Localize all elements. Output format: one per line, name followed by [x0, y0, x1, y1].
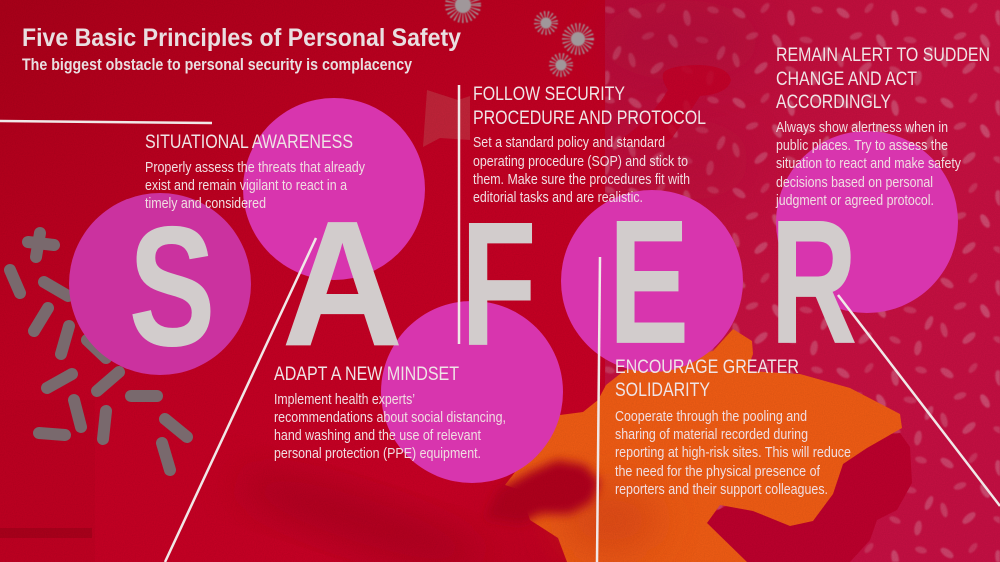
- panel: encourage greater solidarity: [615, 356, 851, 498]
- icon: coronavirus particles: [452, 0, 588, 72]
- panel: encourage greater solidarity: the need for the physical presence of: [615, 464, 821, 480]
- panel: adapt a new mindset: Implement health experts’: [274, 392, 415, 408]
- panel: follow security procedure and protocol: FOLLOW SECURITY: [473, 83, 625, 105]
- panel: remain alert to sudden change: situation to react and make safety: [776, 156, 962, 172]
- dark red paint blot top: [620, 65, 731, 150]
- panel: adapt a new mindset: recommendations about social distancing,: [274, 410, 506, 426]
- panel: follow security procedure and protocol: operating procedure (SOP) and stick to: [473, 154, 688, 170]
- panel: situational awareness: timely and considered: [145, 196, 266, 212]
- panel: remain alert to sudden change: ACCORDINGLY: [776, 91, 891, 113]
- SAFER letters: A: [282, 184, 403, 383]
- SAFER letters: E: [609, 183, 689, 380]
- panel: adapt a new mindset: [274, 363, 506, 462]
- panel: encourage greater solidarity: sharing of material recorded during: [615, 427, 808, 443]
- panel: encourage greater solidarity: reporters and their support colleagues.: [615, 482, 828, 498]
- icon: grey plus and pill marks: [10, 233, 187, 470]
- SAFER letters: S: [129, 191, 215, 381]
- panel: remain alert to sudden change: judgment or agreed protocol.: [775, 193, 934, 209]
- panel: situational awareness: Properly assess the threats that already: [145, 160, 366, 176]
- dark red blot inside splash: [485, 460, 600, 524]
- panel: follow security procedure and protocol: [473, 83, 706, 206]
- SAFER letters: R: [770, 183, 857, 380]
- panel: adapt a new mindset: ADAPT A NEW MINDSET: [274, 363, 459, 385]
- title: [22, 24, 461, 74]
- panel: situational awareness: [145, 131, 366, 212]
- panel: follow security procedure and protocol: PROCEDURE AND PROTOCOL: [473, 107, 706, 129]
- panel: remain alert to sudden change: Always show alertness when in: [776, 120, 948, 136]
- faded grey paper scrap: [423, 90, 470, 147]
- panel: situational awareness: exist and remain vigilant to react in a: [145, 178, 348, 194]
- magenta circles behind letters: [69, 98, 958, 483]
- title: Five Basic Principles of Personal Safety: [22, 24, 461, 52]
- panel: follow security procedure and protocol: Set a standard policy and standard: [473, 135, 665, 151]
- SAFER letters: F: [461, 186, 536, 383]
- panel: remain alert to sudden change: decisions based on personal: [776, 175, 933, 191]
- panel: remain alert to sudden change: CHANGE AND ACT: [776, 68, 917, 90]
- subtitle: The biggest obstacle to personal security is complacency: [22, 56, 413, 74]
- orange paint splash: [505, 329, 902, 562]
- SAFER letters: [129, 183, 857, 383]
- panel: remain alert to sudden change: public places. Try to assess the: [776, 138, 948, 154]
- panel: adapt a new mindset: hand washing and the use of relevant: [274, 428, 481, 444]
- panel: remain alert to sudden change: [775, 44, 990, 209]
- panel: adapt a new mindset: personal protection (PPE) equipment.: [274, 446, 481, 462]
- dark crimson paint blot lower right: [707, 433, 912, 562]
- panel: situational awareness: SITUATIONAL AWARENESS: [145, 131, 353, 153]
- panel: follow security procedure and protocol: them. Make sure the procedures fit with: [473, 172, 690, 188]
- panel: encourage greater solidarity: reporting at high-risk sites. This will reduce: [615, 445, 851, 461]
- panel: encourage greater solidarity: SOLIDARITY: [615, 379, 710, 401]
- panel: follow security procedure and protocol: editorial tasks and are realistic.: [473, 190, 643, 206]
- panel: encourage greater solidarity: ENCOURAGE GREATER: [615, 356, 799, 378]
- panel: encourage greater solidarity: Cooperate through the pooling and: [615, 409, 807, 425]
